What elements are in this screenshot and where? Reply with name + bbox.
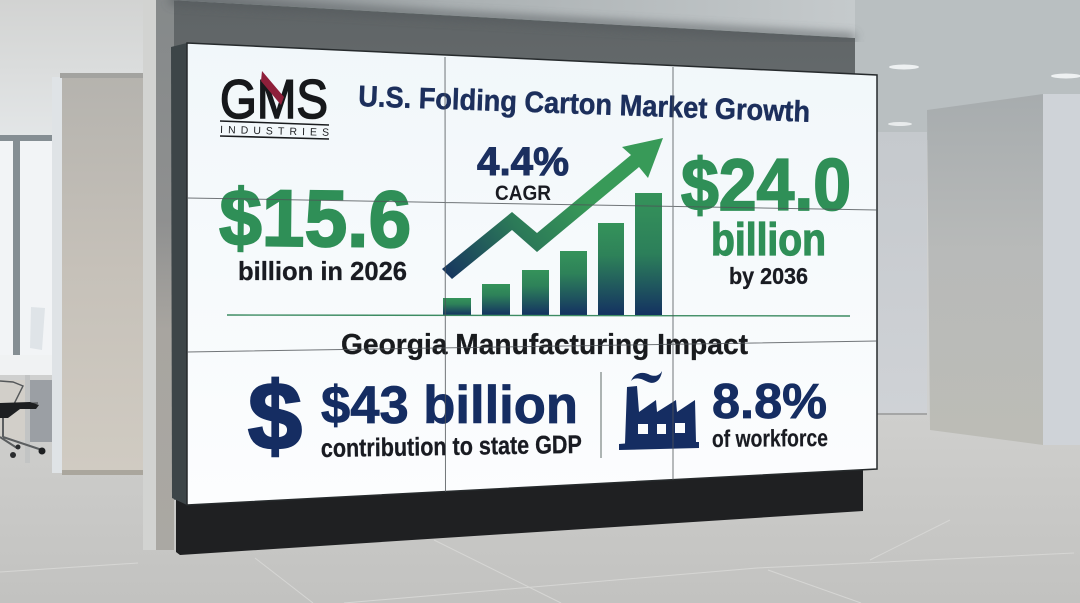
logo: GMS Industries: [220, 68, 329, 139]
stat: workforce share: [619, 371, 828, 453]
label by 2036: by 2036: [729, 263, 808, 289]
left window and office: [0, 0, 143, 463]
value $15.6: $15.6: [219, 173, 412, 264]
stat: CAGR: [477, 140, 569, 205]
left column: [52, 73, 143, 475]
heading: Georgia Manufacturing Impact: Georgia Manufacturing Impact: [341, 329, 748, 361]
label billion in 2026: billion in 2026: [238, 256, 407, 286]
growth bar chart: [443, 193, 662, 315]
floor: [0, 415, 1080, 603]
label billion: billion: [711, 214, 826, 265]
logo red chevron: [261, 71, 284, 105]
icon: factory: [619, 371, 699, 450]
display base plinth: [176, 469, 863, 555]
growth arrow: [442, 138, 663, 279]
value $43 billion: $43 billion: [321, 376, 578, 435]
label contribution to state GDP: contribution to state GDP: [321, 431, 582, 463]
icon: dollar sign: $: [248, 363, 302, 470]
stat: GDP contribution: [248, 363, 582, 470]
logo subtitle: INDUSTRIES: [220, 124, 329, 139]
stat: 2026 market size: [219, 173, 412, 286]
value 4.4%: 4.4%: [477, 140, 569, 184]
right wall and ceiling: [851, 0, 1080, 445]
label of workforce: of workforce: [712, 425, 828, 453]
stat: 2036 market size: [681, 145, 851, 289]
display side frame: [171, 43, 187, 505]
logo wordmark: GMS: [220, 68, 328, 130]
video wall display: [187, 43, 877, 505]
value 8.8%: 8.8%: [712, 375, 827, 429]
label CAGR: CAGR: [495, 182, 551, 205]
value $24.0: $24.0: [681, 145, 851, 226]
back wall behind display: [143, 0, 855, 550]
logo rules: [220, 121, 329, 139]
title: U.S. Folding Carton Market Growth: [358, 80, 811, 129]
